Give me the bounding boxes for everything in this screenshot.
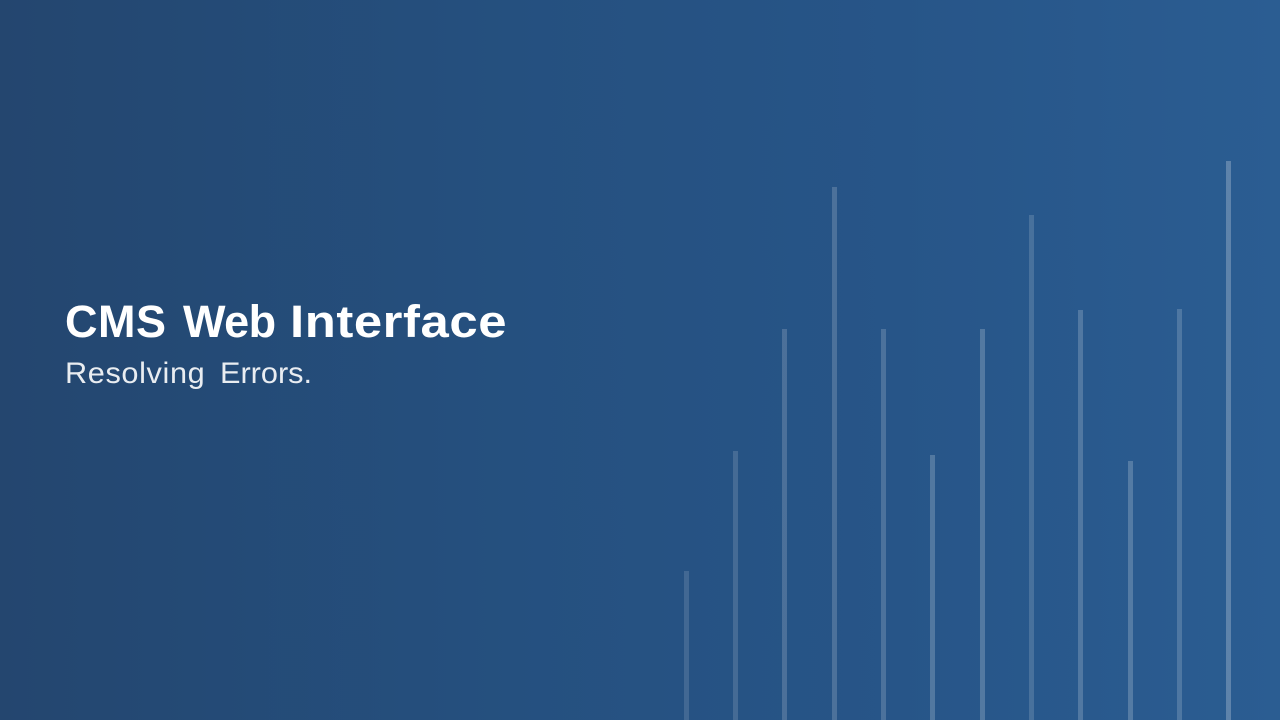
bar chart decoration (684, 161, 1231, 720)
title: CMS (65, 296, 166, 347)
title: Web (183, 296, 276, 347)
title (65, 296, 507, 347)
subtitle: Errors. (220, 357, 312, 390)
subtitle (65, 357, 312, 390)
title: Interface (290, 296, 507, 347)
subtitle: Resolving (65, 357, 205, 390)
